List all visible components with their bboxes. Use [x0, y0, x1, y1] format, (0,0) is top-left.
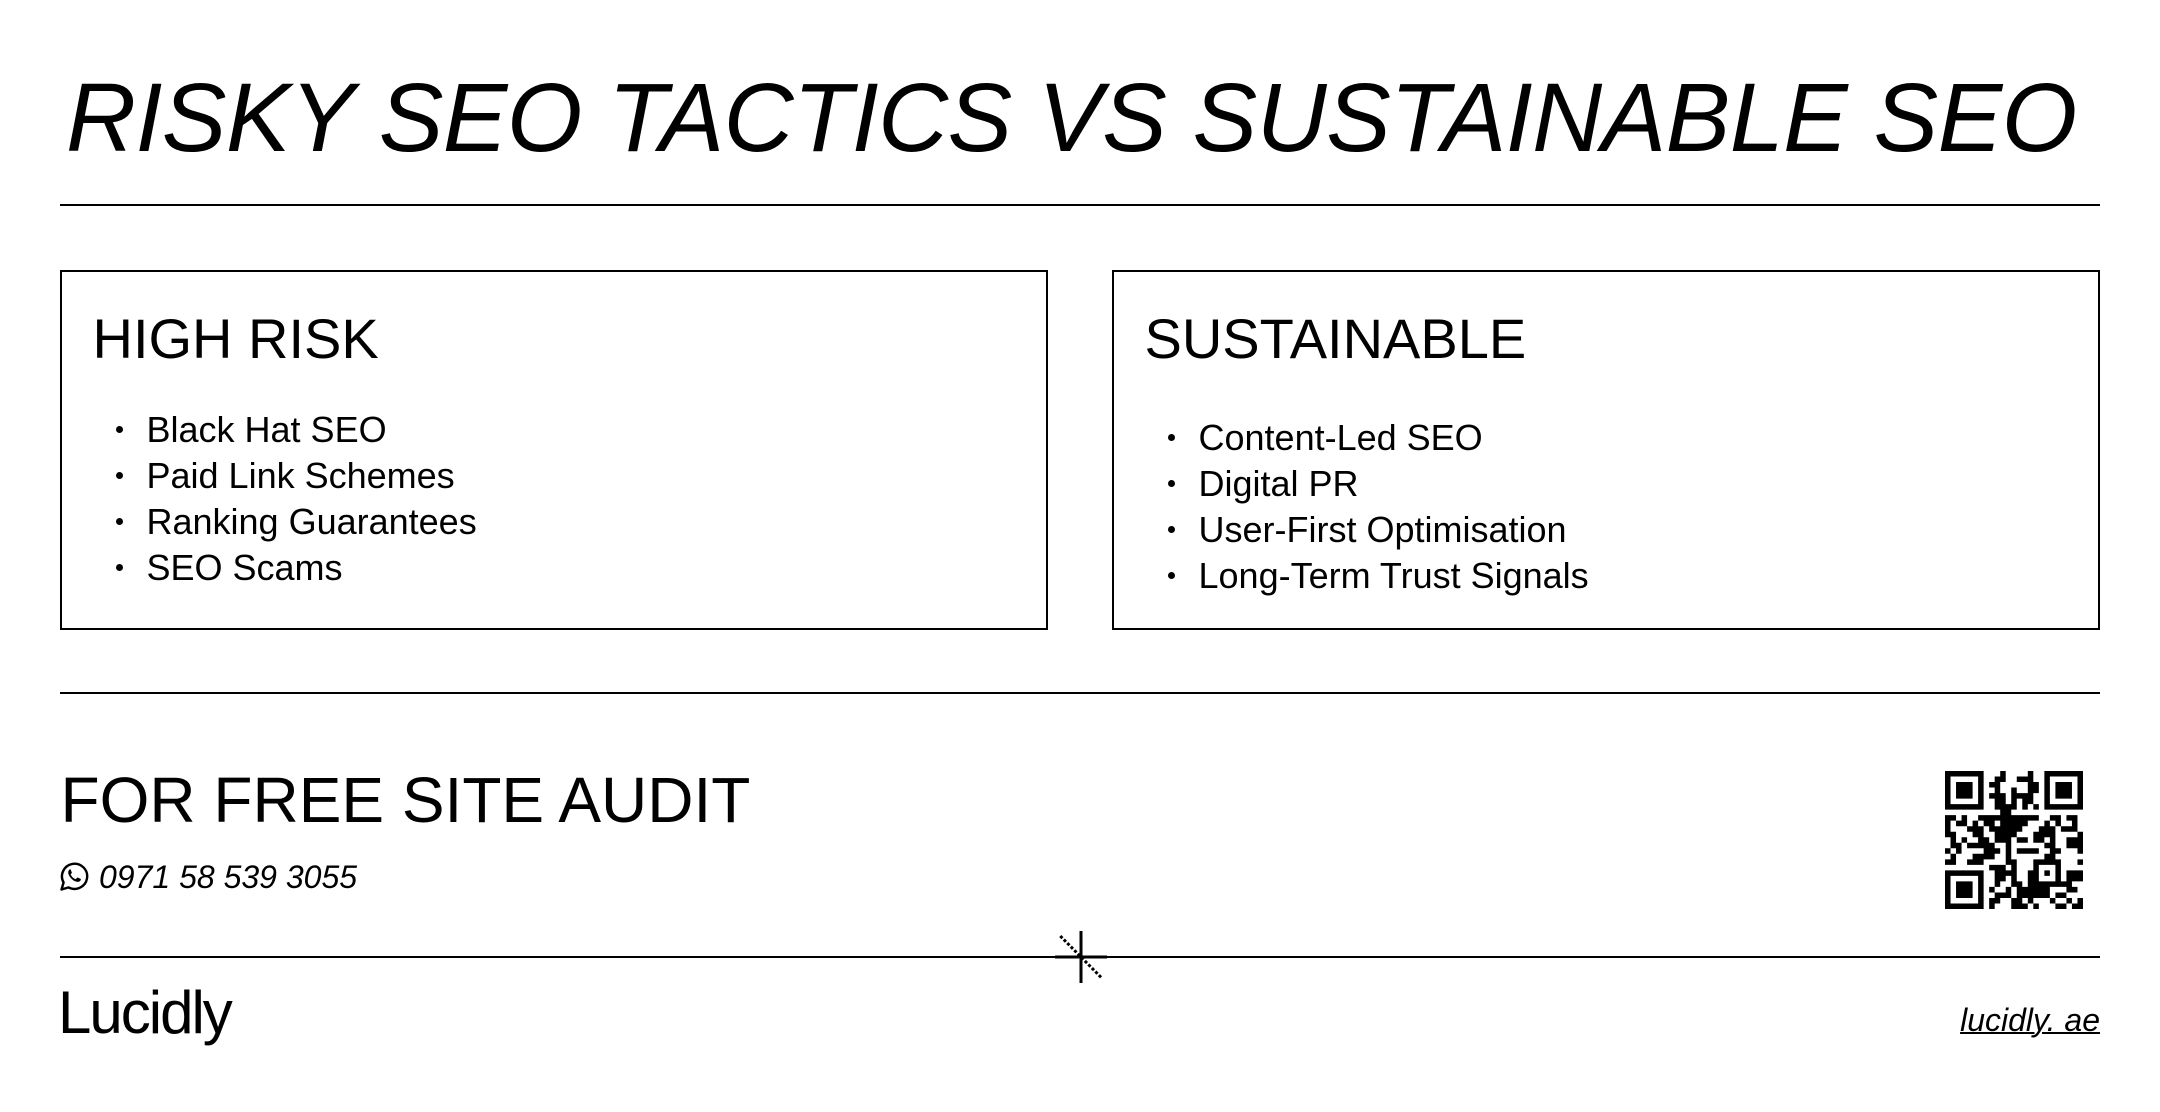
- list: sustainable tactics: Digital PR: [1198, 462, 1359, 504]
- contact: whatsapp number: [60, 859, 358, 895]
- qr code: [1945, 771, 2083, 909]
- list: sustainable tactics: [1168, 416, 1589, 596]
- list: high risk tactics: SEO Scams: [146, 547, 343, 588]
- heading: high risk: HIGH RISK: [92, 307, 379, 370]
- list: sustainable tactics: User-First Optimisation: [1198, 509, 1567, 550]
- website link: lucidly. ae: [1960, 1002, 2100, 1038]
- call to action heading: FOR FREE SITE AUDIT: [60, 764, 750, 836]
- list: sustainable tactics: Long-Term Trust Signals: [1198, 555, 1589, 596]
- list: high risk tactics: Ranking Guarantees: [146, 501, 477, 542]
- list: high risk tactics: Paid Link Schemes: [146, 454, 455, 496]
- list: high risk tactics: [116, 408, 477, 588]
- list: sustainable tactics: Content-Led SEO: [1198, 416, 1483, 458]
- logo: lucidly: Lucidly: [58, 979, 231, 1046]
- title: RISKY SEO TACTICS VS SUSTAINABLE SEO: [66, 63, 2077, 172]
- list: high risk tactics: Black Hat SEO: [146, 408, 387, 450]
- panel: sustainable: [1112, 270, 2100, 630]
- icon: whatsapp: [60, 862, 88, 891]
- icon: sparkle cross: [1055, 931, 1107, 983]
- phone number: 0971 58 539 3055: [99, 859, 357, 895]
- panel: high risk: [60, 270, 1048, 630]
- heading: sustainable: SUSTAINABLE: [1144, 307, 1526, 370]
